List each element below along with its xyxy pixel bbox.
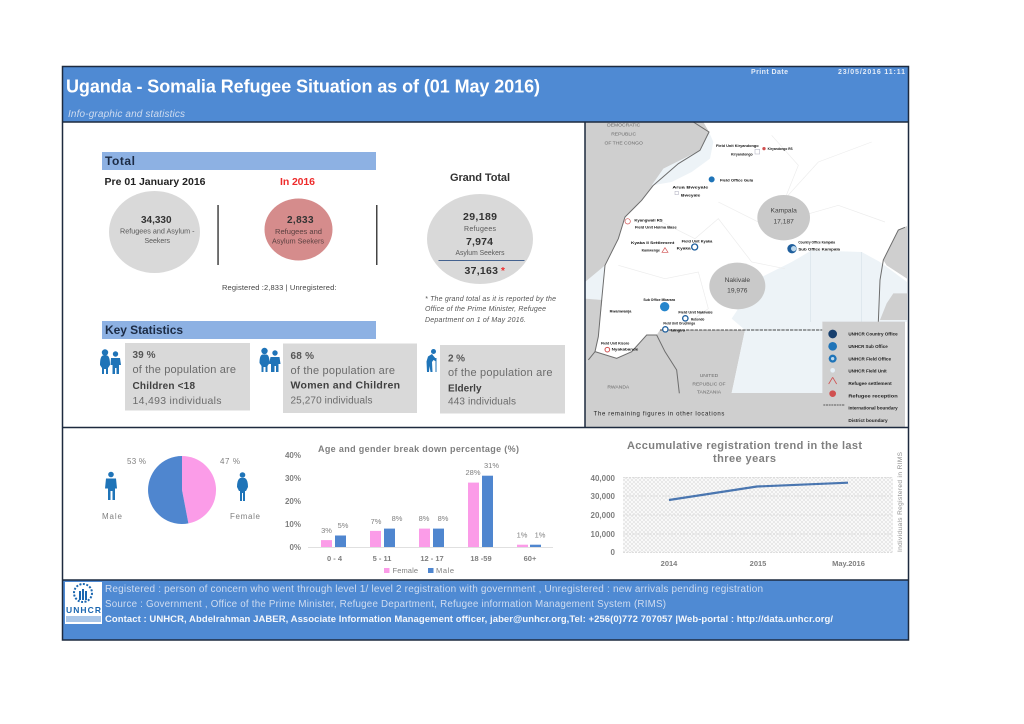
circle: in 2016: Asylum Seekers [272, 238, 325, 246]
line chart: registration trend: Accumulative registration trend in the last [627, 440, 862, 452]
map: location labels: Bweyale [681, 192, 701, 197]
map legend: UNHCR Field Office [848, 356, 892, 361]
source: Source : Government , Office of the Prime Minister, Refugee Department, Refugee information Management System (RIMS) [105, 599, 666, 610]
circle: pre 2016: 34,330 [141, 215, 172, 226]
map: country labels: REPUBLIC [611, 132, 637, 138]
print date value: 23/05/2016 11:11 [838, 69, 905, 76]
circle: grand total: Asylum Seekers [456, 250, 505, 257]
circle: grand total: 37,163 [464, 265, 498, 277]
stat card: elderly: 443 individuals [448, 396, 516, 408]
stat card: children: 14,493 individuals [132, 395, 222, 407]
map: location labels: Kiryandongo RS [768, 146, 793, 151]
map: remaining figures note: The remaining figures in other locations [594, 411, 724, 417]
circle: grand total: * [501, 266, 505, 277]
registered definition: Registered : person of concern who went through level 1/ level 2 registration with government , Unregistered : new arrivals pending registration [105, 584, 763, 595]
map bubble: Kampala [757, 195, 810, 240]
total heading bar: Total [105, 154, 135, 168]
icon: children group 1 [100, 349, 121, 374]
category labels [327, 554, 537, 563]
chart legend [384, 566, 454, 575]
map legend: UNHCR Country Office [848, 332, 898, 337]
circle: pre 2016 [109, 191, 200, 273]
subtitle: Info-graphic and statistics [68, 109, 185, 120]
stat card: children [125, 343, 250, 410]
x axis labels: May.2016 [832, 559, 865, 568]
y axis labels: 10% [285, 520, 301, 529]
grand total footnote [425, 296, 556, 324]
x axis labels: 2015 [750, 559, 766, 568]
bar value labels: 1% [535, 530, 546, 540]
y axis labels: 20% [285, 497, 301, 506]
female bars [321, 483, 528, 547]
bar value labels: 28% [465, 468, 481, 477]
bar value labels: 8% [392, 514, 403, 523]
map bubble: Nakivale: 19,976 [727, 288, 748, 295]
title: Uganda - Somalia Refugee Situation as of (01 May 2016) [66, 76, 540, 96]
in 2016 heading: In 2016 [280, 176, 315, 188]
bar value labels: 3% [321, 526, 332, 535]
key statistics heading bar [102, 321, 376, 339]
y axis labels: 0% [289, 543, 301, 552]
x axis labels: 2014 [661, 559, 678, 568]
panel: total [63, 122, 585, 427]
male label: Male [102, 512, 123, 521]
map: location labels: Kyaka [677, 246, 692, 251]
pie label male percent: 53 % [127, 457, 146, 466]
map: location labels: Field Unit Kyaka [682, 239, 713, 244]
grand total footnote: Department on 1 of May 2016. [425, 317, 526, 324]
map: location labels: Arua Bweyale [672, 184, 709, 189]
circle: grand total: 29,189 [463, 211, 497, 223]
grand total footnote: Office of the Prime Minister, Refugee [425, 306, 546, 313]
panel: gender split [102, 456, 261, 524]
vertical axis title: Individuals Registered in RIMS [897, 451, 904, 552]
circle: grand total: 7,974 [466, 236, 493, 248]
map: location labels: Kyaka II Settlement [631, 240, 675, 245]
stat card: children: Children <18 [132, 381, 195, 392]
map: location labels: Field Unit Kisoro [601, 340, 630, 345]
UNHCR logo: UNHCR [66, 605, 101, 615]
stat card: elderly [440, 345, 565, 414]
print date: Print Date [751, 69, 788, 76]
chart legend: Female [392, 566, 418, 575]
map: location labels: Kamwenge [642, 247, 661, 252]
total heading bar [102, 152, 376, 170]
map: location labels: Nyakabande [612, 347, 639, 352]
panel: map [585, 122, 907, 427]
category labels: 5 - 11 [373, 554, 391, 563]
map: country labels: TANZANIA [697, 390, 722, 396]
y axis labels [285, 451, 301, 552]
map: country labels [604, 123, 726, 396]
trend line [669, 483, 848, 500]
circle: in 2016: Refugees and [275, 229, 322, 236]
registered note: Registered :2,833 | Unregistered: [222, 283, 336, 292]
category labels: 12 - 17 [420, 554, 444, 563]
pie: male share [148, 456, 188, 524]
map: DRC land [585, 122, 709, 282]
pre 2016 heading: Pre 01 January 2016 [104, 176, 206, 188]
map bubble: Nakivale [709, 263, 765, 309]
map: borders [588, 122, 905, 393]
footer banner [62, 580, 908, 640]
male bars [335, 476, 541, 547]
y axis labels: 20,000 [591, 511, 616, 520]
map: country labels: OF THE CONGO [604, 141, 643, 147]
line chart: registration trend [591, 440, 904, 568]
map: location labels: Kiryandongo [731, 151, 753, 156]
map: location labels: Field Office Gulu [720, 177, 754, 182]
map: location labels: Country Office Kampala [798, 240, 836, 245]
map: location labels: Field Unit Nakivale [678, 309, 713, 314]
stat card: children: of the population are [132, 364, 236, 376]
map legend: Refugee settlement [848, 381, 892, 386]
bar chart: age and gender: Age and gender break down percentage (%) [318, 444, 519, 454]
category labels: 18 -59 [470, 554, 492, 563]
map: location labels: Rwamwanja [610, 309, 632, 314]
bar value labels [321, 461, 546, 540]
female label: Female [230, 512, 261, 521]
map: Kenya land [883, 226, 907, 279]
grand total heading: Grand Total [450, 172, 510, 184]
stat card: elderly: of the population are [448, 367, 552, 379]
y axis labels: 40% [285, 451, 301, 460]
y axis labels: 10,000 [591, 530, 616, 539]
line chart: registration trend: three years [713, 453, 776, 465]
y axis labels [591, 474, 616, 557]
pie label female percent: 47 % [220, 457, 240, 466]
y axis labels: 30% [285, 474, 301, 483]
key statistics heading bar: Key Statistics [105, 323, 183, 337]
header banner [62, 66, 908, 122]
circle: grand total: Refugees [464, 226, 496, 233]
circle: in 2016 [264, 198, 332, 260]
bar chart: age and gender [285, 444, 553, 575]
y axis labels: 0 [611, 548, 616, 557]
map: lake Albert [652, 132, 713, 185]
stat card: women and children: Women and Children [290, 380, 400, 392]
category labels: 0 - 4 [327, 554, 343, 563]
x axis labels [661, 559, 865, 568]
bar value labels: 5% [338, 521, 349, 530]
map: western land [585, 299, 602, 364]
circle: pre 2016: Refugees and Asylum - [120, 228, 195, 236]
bar value labels: 8% [438, 514, 449, 523]
circle: pre 2016: Seekers [144, 238, 170, 245]
map: office markers [605, 147, 797, 352]
icon: male [105, 472, 117, 500]
map: lake Edward [585, 265, 605, 300]
chart legend: Male [436, 566, 454, 575]
map: location labels: Sub Office Mbarara [643, 297, 676, 302]
stat card: elderly: 2 % [448, 354, 465, 364]
category labels: 60+ [524, 554, 537, 563]
map: country labels: REPUBLIC OF [692, 381, 726, 387]
contact: Contact : UNHCR, Abdelrahman JABER, Associate Information Management officer, jaber@unhcr.org,Tel: +256(0)772 707057 |Web-portal : http://data.unhcr.org/ [105, 614, 833, 625]
UNHCR logo [65, 582, 102, 624]
circle: in 2016: 2,833 [287, 215, 314, 226]
divider right [376, 205, 378, 265]
map: country labels: RWANDA [607, 385, 630, 391]
map bubble: Nakivale: Nakivale [725, 277, 750, 284]
map: location labels: Isingiro [671, 328, 686, 333]
map bubble: Kampala: 17,187 [773, 219, 794, 226]
map legend: UNHCR Sub Office [848, 344, 888, 349]
stat card: women and children [283, 344, 417, 413]
bar value labels: 8% [419, 514, 430, 523]
stat card: women and children: 68 % [290, 351, 314, 362]
map: location labels [601, 143, 841, 352]
divider left [217, 205, 219, 265]
icon: female [237, 472, 248, 501]
map: district lines [618, 135, 885, 325]
map legend: District boundary [848, 418, 888, 423]
map bubble: Kampala: Kampala [771, 208, 797, 215]
icon: children group 2 [260, 348, 280, 372]
map legend: Refugee reception [848, 393, 898, 398]
grand total footnote: * The grand total as it is reported by the [425, 296, 556, 303]
map: lake Victoria [732, 250, 907, 393]
bar value labels: 1% [517, 530, 528, 540]
bar value labels: 31% [484, 461, 499, 470]
map: bottom land strip [585, 393, 905, 427]
map: location labels: Kyangwali RS [634, 217, 663, 222]
stat card: women and children: 25,270 individuals [290, 396, 372, 406]
map: Rwanda and Tanzania land [585, 330, 745, 427]
map: location labels: Field Unit Oruchinga [663, 321, 696, 326]
map: location labels: Field Unit Kiryandongo [716, 143, 759, 148]
y axis labels: 30,000 [591, 492, 616, 501]
map legend: International boundary [848, 406, 898, 411]
map legend [822, 322, 905, 427]
map: location labels: Rubondo [691, 316, 705, 321]
map: Kenya land south [880, 293, 907, 320]
pie: female share [182, 456, 216, 523]
stat card: women and children: of the population are [290, 365, 395, 377]
y axis labels: 40,000 [591, 474, 616, 483]
stat card: children: 39 % [132, 350, 156, 361]
icon: elderly person [426, 349, 436, 372]
circle: grand total [427, 194, 533, 284]
frame lines [62, 66, 908, 640]
map legend: UNHCR Field Unit [848, 369, 887, 374]
map: location labels: Sub Office Kampala [798, 246, 841, 251]
stat card: elderly: Elderly [448, 384, 482, 394]
map: location labels: Field Unit Hoima Base [635, 224, 677, 229]
bar value labels: 7% [371, 517, 382, 526]
map: country labels: UNITED [700, 373, 719, 379]
map: country labels: DEMOCRATIC [607, 123, 641, 129]
